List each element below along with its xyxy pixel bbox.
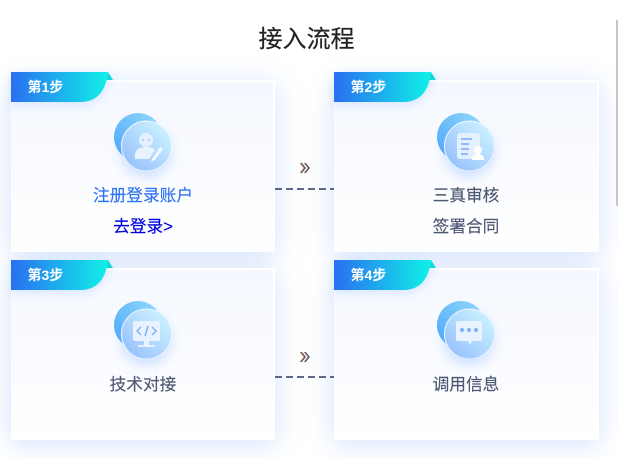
step 4 tag text: 第4步 <box>350 267 386 283</box>
step 2 card background <box>334 80 599 252</box>
step 4 label: 调用信息 <box>433 375 499 394</box>
chevron 2 <box>300 352 310 362</box>
step 4 tag <box>330 260 436 296</box>
step 2 label line 2: 签署合同 <box>433 217 499 236</box>
chevron 1 <box>300 162 310 174</box>
icon: user with pencil <box>114 113 176 182</box>
step 1 label: 注册登录账户 <box>93 186 193 205</box>
icon: document with person <box>437 113 499 182</box>
step 2 tag <box>330 72 436 108</box>
scrollbar <box>616 20 618 206</box>
icon: monitor with code <box>114 301 176 370</box>
step 3 card background <box>11 268 275 440</box>
arrow: step 3 to step 4 <box>275 352 334 378</box>
step 2 label line 1: 三真审核 <box>433 186 499 205</box>
dashed line 2 <box>275 376 334 378</box>
step 1 tag <box>8 72 113 108</box>
step 1 tag text: 第1步 <box>28 79 63 95</box>
step 2 tag text: 第2步 <box>350 79 386 95</box>
step 3 tag <box>8 260 113 296</box>
step 3 label: 技术对接 <box>110 375 176 394</box>
dashed line 1 <box>275 188 334 190</box>
panel: step 1 <box>0 68 287 267</box>
title: 接入流程 <box>258 26 354 53</box>
panel: step 4 <box>322 256 611 456</box>
panel: step 3 <box>0 256 287 456</box>
step 3 tag text: 第3步 <box>28 267 63 283</box>
step 4 card background <box>334 268 599 440</box>
step 1 login link: 去登录> <box>113 217 173 236</box>
icon: chat bubble <box>437 301 500 370</box>
step 1 card background <box>11 80 275 252</box>
panel: step 2 <box>322 68 611 267</box>
arrow: step 1 to step 2 <box>275 162 334 190</box>
